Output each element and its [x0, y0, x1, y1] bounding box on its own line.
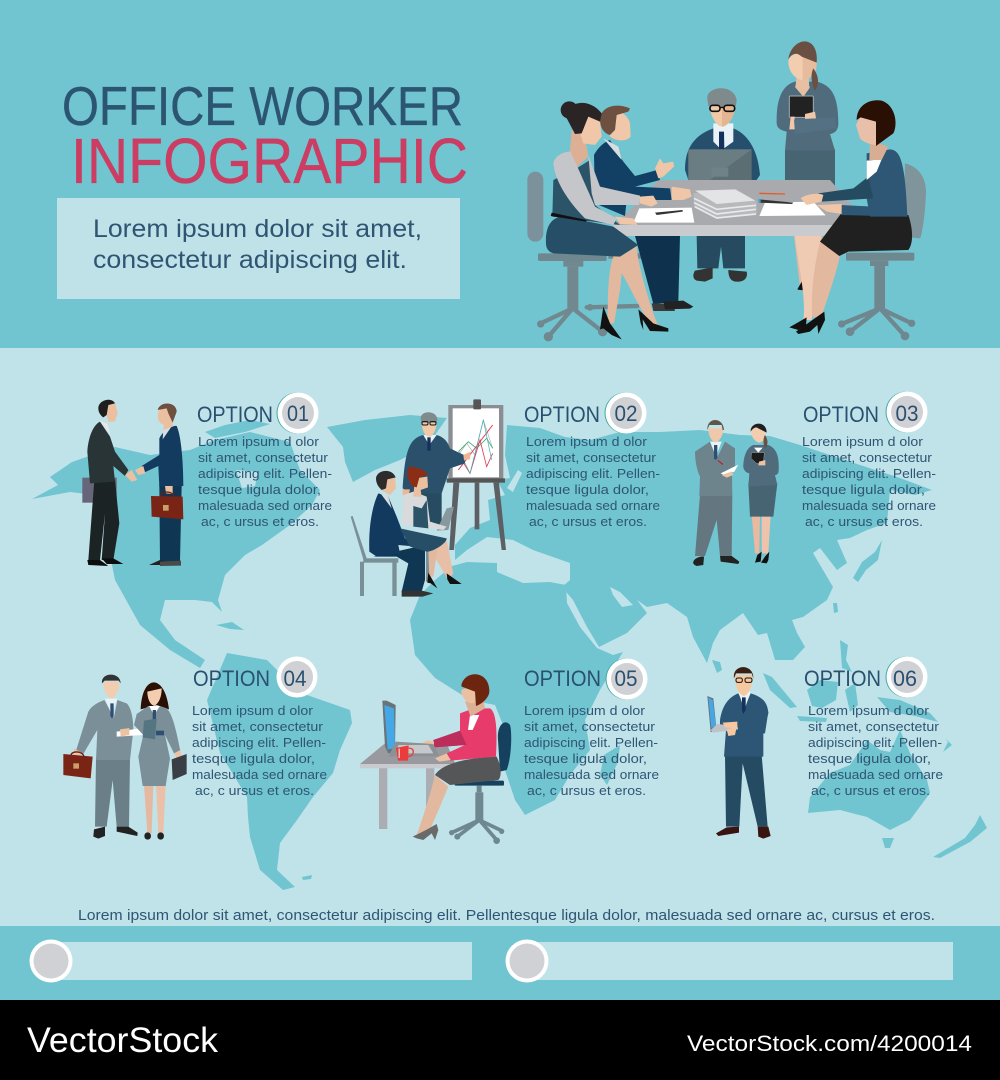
illustration: woman working at desk	[360, 674, 511, 844]
text block 06: tesque ligula dolor,	[808, 752, 931, 766]
man with notepad	[693, 420, 739, 566]
heading line one: OFFICE WORKER	[62, 75, 463, 137]
text block 03: Lorem ipsum d olor	[802, 435, 923, 449]
text block 02: malesuada sed ornare	[526, 499, 660, 513]
text block 06: sit amet, consectetur	[808, 720, 939, 734]
option 05	[524, 658, 659, 798]
text block 01: sit amet, consectetur	[198, 451, 328, 465]
text block 05	[524, 704, 659, 798]
text block 03: sit amet, consectetur	[802, 451, 932, 465]
option 01 label: OPTION	[197, 402, 273, 427]
badge 06	[886, 656, 928, 698]
option 06 label: OPTION	[804, 666, 881, 691]
illustration: two men shaking hands	[82, 400, 183, 566]
option 01	[197, 392, 332, 529]
subtitle panel: Lorem ipsum dolor sit amet,	[93, 215, 422, 243]
text block 03: malesuada sed ornare	[802, 499, 936, 513]
text block 02: Lorem ipsum d olor	[526, 435, 647, 449]
footnote: Lorem ipsum dolor sit amet, consectetur adipiscing elit. Pellentesque ligula dolor, malesuada sed ornare ac, cursus et eros.	[78, 908, 935, 924]
presenter	[403, 412, 471, 525]
option 02	[524, 392, 660, 529]
text block 02: ac, c ursus et eros.	[529, 515, 647, 529]
text block 01: tesque ligula dolor,	[198, 483, 321, 497]
illustration: colleagues with notepad and tablet	[693, 420, 779, 566]
world map	[32, 415, 987, 890]
table	[613, 180, 871, 236]
option 04	[192, 656, 327, 798]
text block 06: ac, c ursus et eros.	[811, 784, 930, 798]
text block 06: adipiscing elit. Pellen-	[808, 736, 942, 750]
seated woman right	[789, 100, 912, 334]
text block 05: tesque ligula dolor,	[524, 752, 647, 766]
subtitle panel: consectetur adipiscing elit.	[93, 246, 407, 274]
seated man	[369, 471, 433, 597]
badge 06: 06	[893, 666, 917, 691]
bar right	[506, 940, 953, 982]
bottom band	[0, 926, 1000, 1000]
text block 03: ac, c ursus et eros.	[805, 515, 923, 529]
option 03 label: OPTION	[803, 402, 879, 427]
text block 04: malesuada sed ornare	[192, 768, 327, 782]
text block 04: sit amet, consectetur	[192, 720, 323, 734]
badge 02: 02	[614, 401, 638, 426]
text block 02: tesque ligula dolor,	[526, 483, 649, 497]
text block 01: Lorem ipsum d olor	[198, 435, 319, 449]
text block 03: adipiscing elit. Pellen-	[802, 467, 936, 481]
man in navy suit	[594, 106, 693, 311]
woman with folder	[134, 682, 187, 840]
seas	[236, 470, 633, 607]
illustration: man with laptop	[707, 667, 771, 839]
text block 02: adipiscing elit. Pellen-	[526, 467, 660, 481]
standing woman with tablet	[777, 41, 838, 291]
text block 02	[526, 435, 660, 529]
badge 03: 03	[896, 401, 918, 426]
badge 04	[276, 656, 318, 698]
left chair	[527, 172, 645, 341]
text block 04	[192, 704, 327, 798]
man with briefcase	[63, 675, 143, 839]
text block 01: malesuada sed ornare	[198, 499, 332, 513]
text block 05: sit amet, consectetur	[524, 720, 655, 734]
badge 01: 01	[287, 401, 309, 426]
illustration: presentation at easel	[351, 399, 506, 597]
watermark bar	[0, 1000, 1000, 1080]
text block 04: adipiscing elit. Pellen-	[192, 736, 326, 750]
bar left	[30, 940, 472, 982]
illustration: colleagues with briefcases	[63, 675, 187, 840]
text block 06	[808, 704, 943, 798]
text block 04: Lorem ipsum d olor	[192, 704, 313, 718]
text block 02: sit amet, consectetur	[526, 451, 656, 465]
option 06	[804, 656, 943, 798]
woman	[413, 674, 501, 840]
woman with tablet	[743, 424, 779, 563]
text block 04: tesque ligula dolor,	[192, 752, 315, 766]
text block 06: malesuada sed ornare	[808, 768, 943, 782]
seated woman with laptop	[400, 466, 462, 588]
option 03	[802, 392, 936, 529]
heading line two: INFOGRAPHIC	[71, 125, 468, 197]
desk	[360, 743, 455, 829]
title	[62, 75, 468, 197]
text block 04: ac, c ursus et eros.	[195, 784, 314, 798]
man with laptop	[685, 88, 760, 282]
text block 03: tesque ligula dolor,	[802, 483, 925, 497]
badge 05: 05	[614, 666, 638, 691]
text block 03	[802, 435, 936, 529]
text block 06: Lorem ipsum d olor	[808, 704, 929, 718]
chair	[351, 516, 430, 596]
subtitle panel	[57, 198, 460, 299]
option 04 label: OPTION	[193, 666, 270, 691]
seated woman left	[546, 101, 668, 339]
option 02 label: OPTION	[524, 402, 600, 427]
text block 05: Lorem ipsum d olor	[524, 704, 645, 718]
right chair	[838, 163, 926, 340]
watermark bar: VectorStock.com/4200014	[687, 1031, 972, 1056]
illustration: meeting around table	[527, 41, 926, 341]
watermark bar: VectorStock	[27, 1021, 219, 1060]
text block 01: ac, c ursus et eros.	[201, 515, 319, 529]
option 05 label: OPTION	[524, 666, 601, 691]
text block 01	[198, 435, 332, 529]
text block 05: malesuada sed ornare	[524, 768, 659, 782]
text block 05: adipiscing elit. Pellen-	[524, 736, 658, 750]
chair	[449, 722, 511, 844]
laptop and cup	[382, 701, 439, 761]
easel	[447, 399, 506, 550]
text block 01: adipiscing elit. Pellen-	[198, 467, 332, 481]
text block 05: ac, c ursus et eros.	[527, 784, 646, 798]
badge 04: 04	[284, 666, 306, 691]
